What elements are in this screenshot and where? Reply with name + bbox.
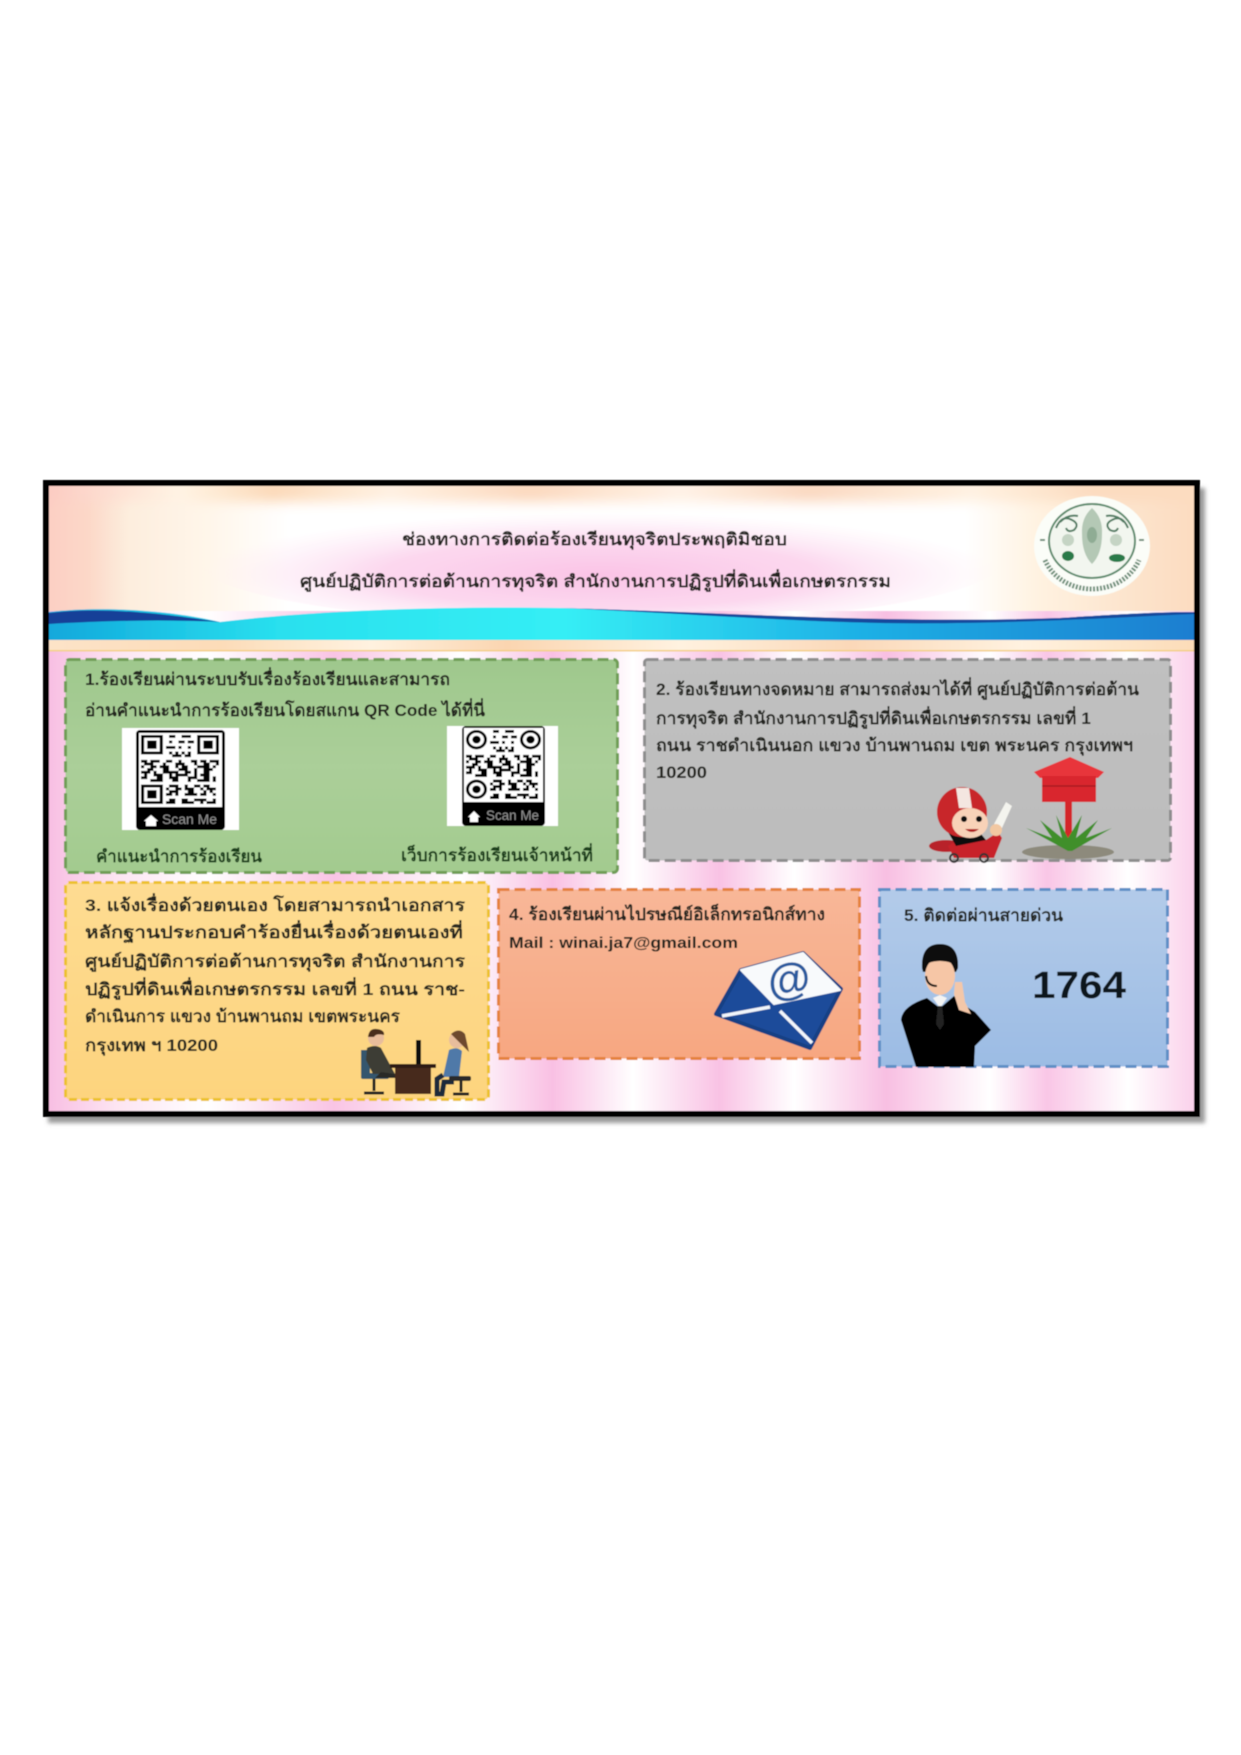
infographic canvas <box>42 479 1208 1126</box>
icon: red mailbox <box>1022 757 1114 859</box>
panel 2 text <box>656 677 1139 782</box>
panel 4: complaint by e-mail <box>498 890 860 1058</box>
hotline number: 1764 <box>1032 965 1126 1007</box>
panel 3 text: ดำเนินการ แขวง บ้านพานถม เขตพระนคร <box>85 1007 401 1026</box>
QR code 1 <box>122 728 239 830</box>
panel 1 text <box>85 667 485 720</box>
panel 2 text: การทุจริต สำนักงานการปฏิรูปที่ดินเพื่อเกษตรกรรม เลขที่ 1 <box>656 706 1091 730</box>
header title line 1: ช่องทางการติดต่อร้องเรียนทุจริตประพฤติมิชอบ <box>402 529 787 550</box>
QR caption 2: เว็บการร้องเรียนเจ้าหน้าที่ <box>401 843 593 865</box>
panel 2 text: 10200 <box>656 763 707 782</box>
panel 2 text: 2. ร้องเรียนทางจดหมาย สามารถส่งมาได้ที่ ศูนย์ปฏิบัติการต่อต้าน <box>656 677 1139 701</box>
icon: e-mail envelope: @ <box>764 952 814 1007</box>
panel 4 text: Mail : winai.ja7@gmail.com <box>509 935 738 952</box>
panel 2: complaint by post <box>644 660 1170 862</box>
panel 3 text: ศูนย์ปฏิบัติการต่อต้านการทุจริต สำนักงานการ <box>85 951 466 973</box>
frame drop shadow <box>48 488 1205 1123</box>
panel 3 text: 3. แจ้งเรื่องด้วยตนเอง โดยสามารถนำเอกสาร <box>85 893 466 915</box>
icon: e-mail envelope <box>716 952 841 1048</box>
header title line 2: ศูนย์ปฏิบัติการต่อต้านการทุจริต สำนักงานการปฏิรูปที่ดินเพื่อเกษตรกรรม <box>300 569 891 593</box>
QR code 2 <box>447 726 558 826</box>
icon: officer and visitor at desk <box>361 1029 471 1094</box>
panel 1 text: อ่านคำแนะนำการร้องเรียนโดยสแกน QR Code ได้ที่นี่ <box>85 698 485 720</box>
panel 5 heading: 5. ติดต่อผ่านสายด่วน <box>904 906 1063 925</box>
panel 4 text: 4. ร้องเรียนผ่านไปรษณีย์อิเล็กทรอนิกส์ทาง <box>509 902 825 924</box>
header band <box>48 485 1195 612</box>
icon: scooter mascot <box>929 787 1012 862</box>
QR code 1: Scan Me <box>162 811 217 827</box>
panel 4 text <box>509 902 825 952</box>
QR code 2: Scan Me <box>486 807 539 823</box>
panel 3 text: กรุงเทพ ฯ 10200 <box>85 1036 218 1056</box>
QR caption 1: คำแนะนำการร้องเรียน <box>96 846 262 866</box>
icon: organisation seal <box>1034 496 1150 596</box>
wave ribbon <box>49 608 1194 652</box>
panel 3 text <box>85 893 466 1056</box>
panel 5: hotline <box>880 890 1168 1067</box>
panel 1: online complaint system with QR codes <box>66 660 618 872</box>
outer black frame and background <box>46 483 1197 1114</box>
panel 3 text: หลักฐานประกอบคำร้องยื่นเรื่องด้วยตนเองที่ <box>85 920 463 944</box>
panel 3: complain in person <box>66 882 488 1100</box>
panel 3 text: ปฏิรูปที่ดินเพื่อเกษตรกรรม เลขที่ 1 ถนน ราช- <box>85 977 465 1001</box>
panel 1 text: 1.ร้องเรียนผ่านระบบรับเรื่องร้องเรียนและสามารถ <box>85 667 450 689</box>
icon: agent with headset <box>901 944 991 1067</box>
panel 2 text: ถนน ราชดำเนินนอก แขวง บ้านพานถม เขต พระนคร กรุงเทพฯ <box>656 736 1133 756</box>
